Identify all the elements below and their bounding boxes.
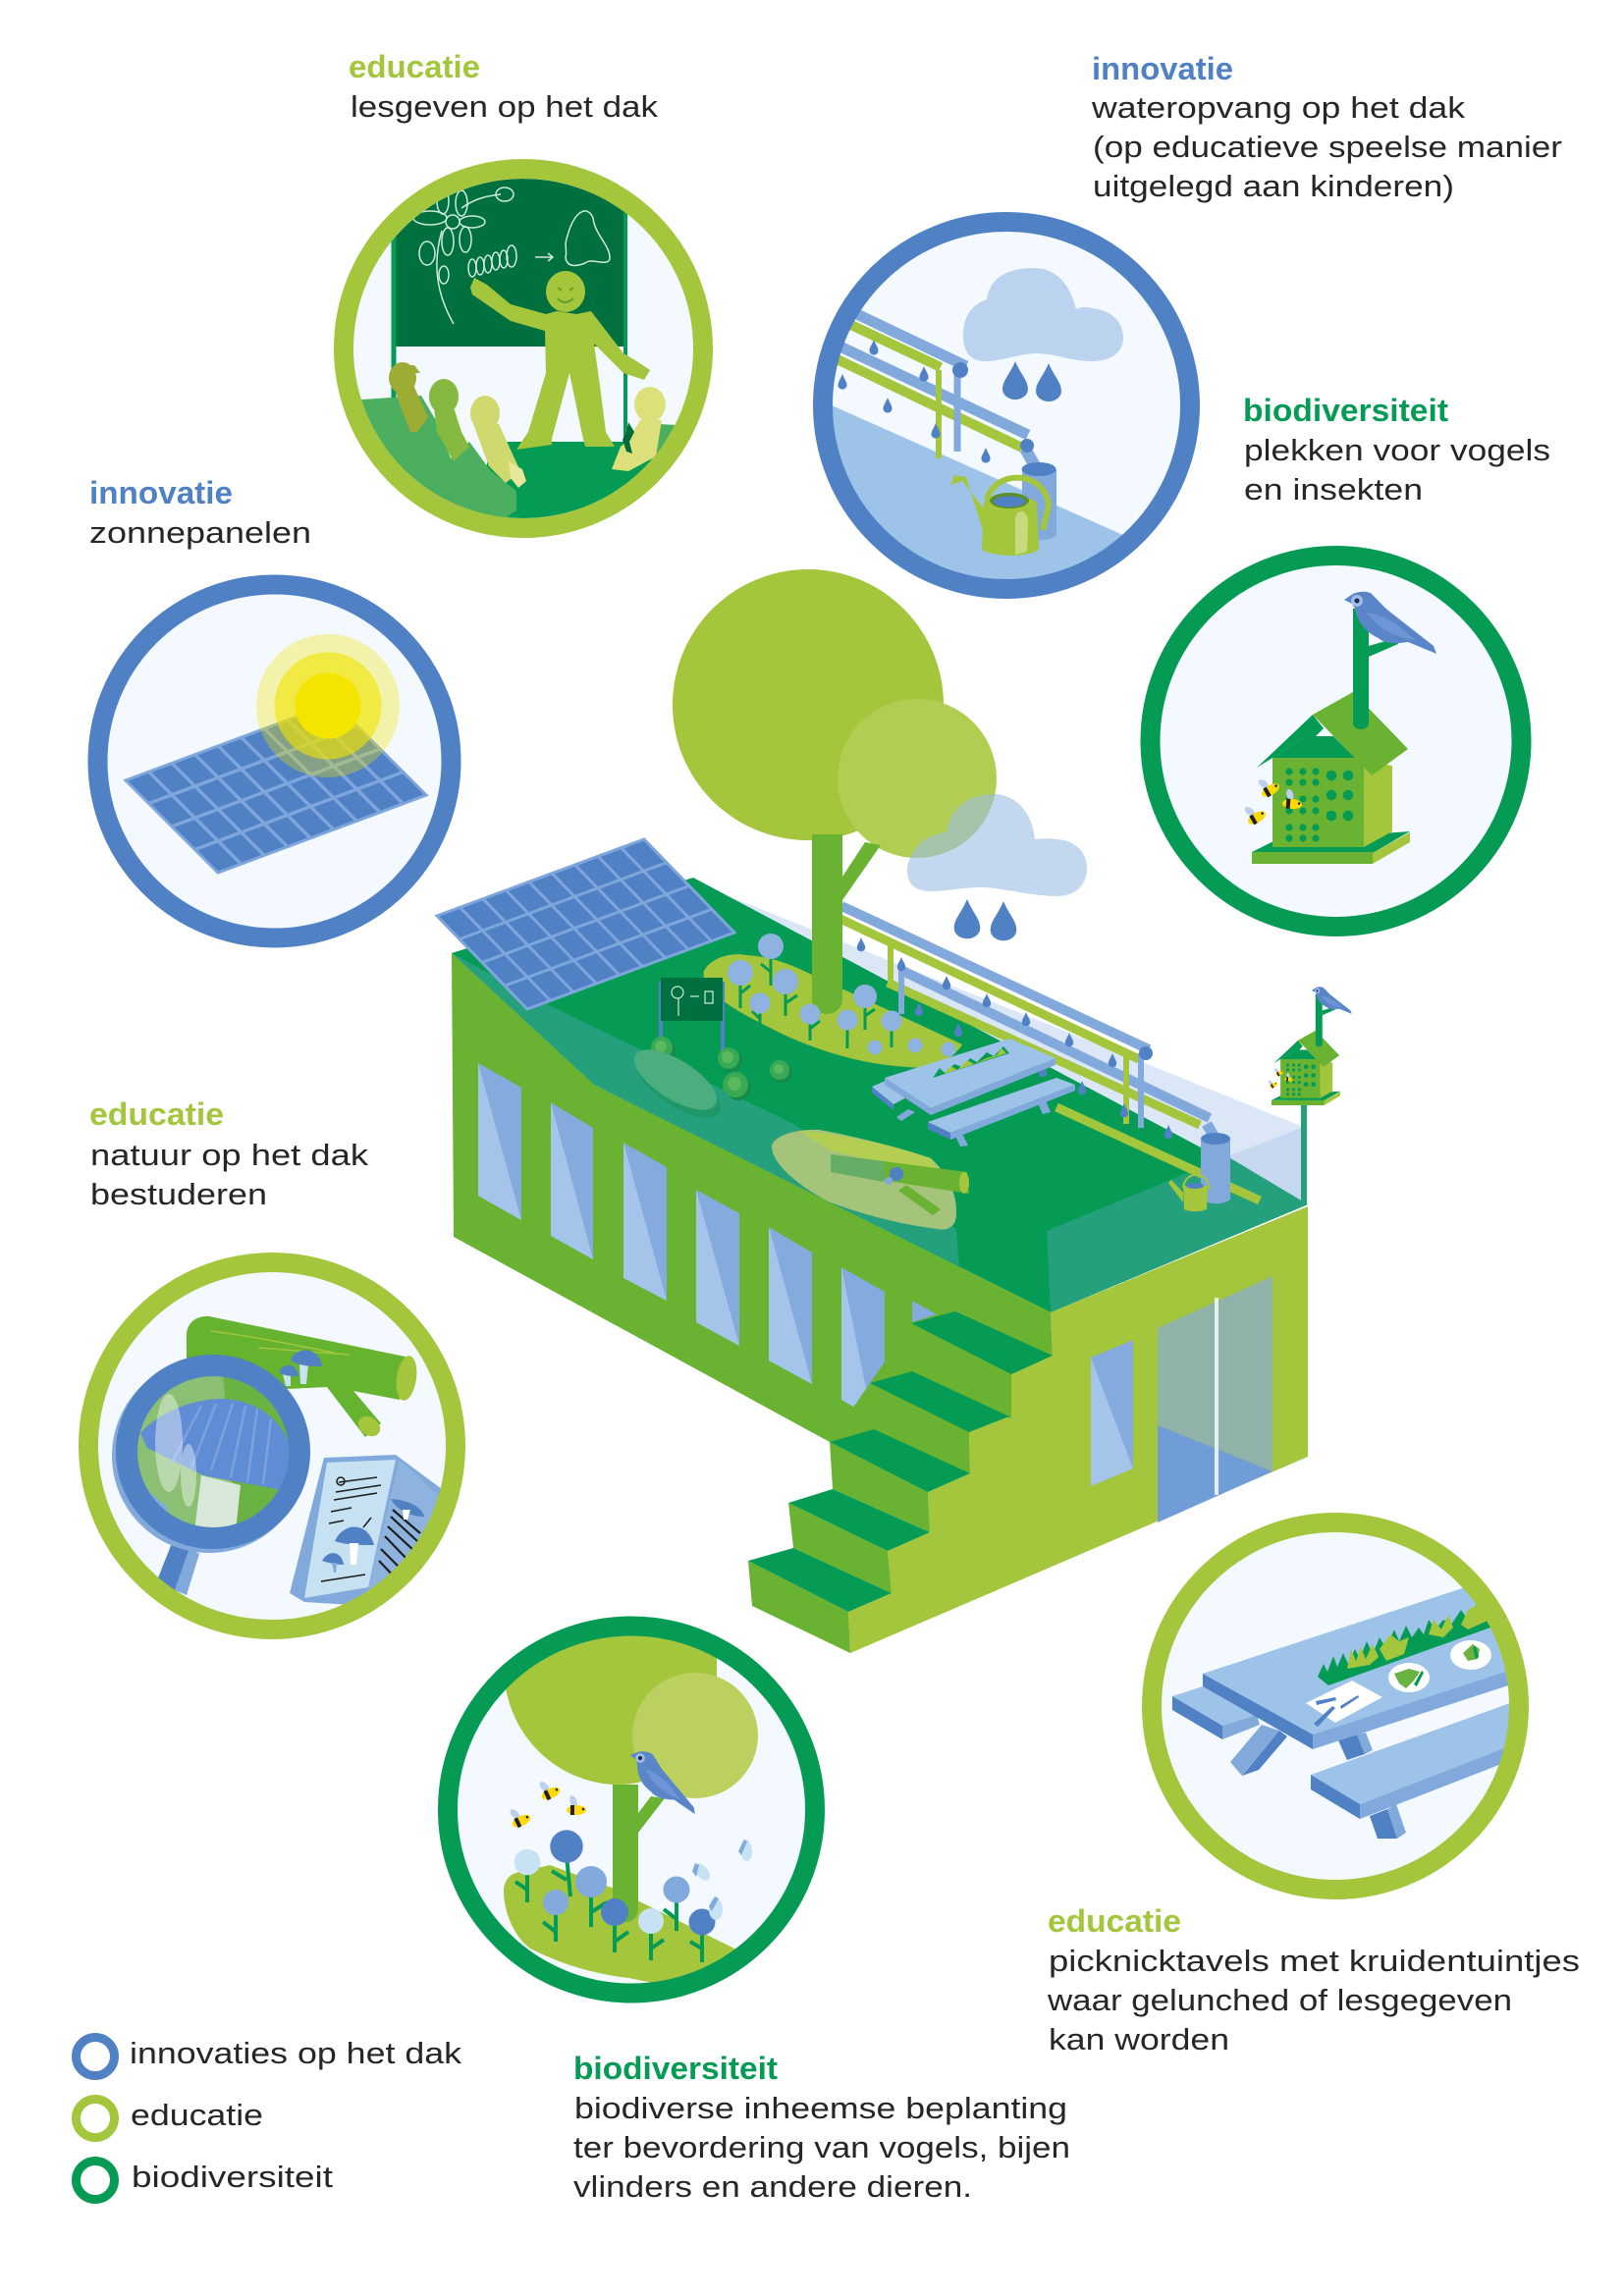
- ground: [478, 442, 666, 518]
- heading: educatie picknicktavels: waar gelunched of lesgegeven: [1047, 1983, 1512, 2017]
- heading: educatie lesgeven: lesgeven op het dak: [351, 89, 659, 124]
- building illustration: [437, 569, 1352, 1653]
- heading: biodiversiteit beplanting: ter bevordering van vogels, bijen: [573, 2130, 1070, 2164]
- panel: teacher on the roof: [344, 137, 703, 550]
- roof: [452, 878, 1308, 1312]
- heading: educatie picknicktavels: [1047, 1903, 1580, 2056]
- barrel: [1022, 469, 1056, 540]
- bird house on pole: [1267, 987, 1352, 1204]
- icon: sun: [256, 634, 400, 777]
- panel: water catchment: [805, 222, 1190, 609]
- mushrooms: [283, 1364, 308, 1386]
- icon: solar panel: [126, 703, 426, 873]
- icon: rain drops: [954, 899, 1016, 940]
- table: [1203, 1588, 1506, 1735]
- shrubs: [625, 1037, 792, 1129]
- icon: watering can: [950, 475, 1049, 556]
- butterflies: [691, 1840, 753, 1920]
- left bench: [1172, 1686, 1257, 1726]
- log patch: [772, 1130, 969, 1229]
- flower bed: [704, 954, 962, 1068]
- heading: educatie lesgeven: [349, 49, 659, 124]
- windows: [478, 1063, 937, 1417]
- heading: educatie picknicktavels: kan worden: [1049, 2022, 1229, 2056]
- legend: innovaties op het dak: [130, 2036, 462, 2070]
- handle: [175, 1548, 199, 1595]
- heading: innovatie wateropvang: wateropvang op het dak: [1091, 90, 1466, 125]
- legs: [1230, 1725, 1279, 1776]
- solar panel on roof: [437, 839, 734, 1009]
- heading: innovatie wateropvang: innovatie: [1092, 51, 1233, 86]
- picnic table: [872, 1039, 1075, 1147]
- flowers: [515, 1855, 702, 1962]
- heading: educatie natuur: bestuderen: [90, 1177, 267, 1211]
- heading: educatie picknicktavels: educatie: [1048, 1903, 1181, 1939]
- heading: educatie natuur: natuur op het dak: [90, 1138, 369, 1172]
- heading: innovatie zonnepanelen: [89, 475, 311, 550]
- herbs: [1318, 1602, 1497, 1685]
- heading: biodiversiteit beplanting: [573, 2051, 1070, 2204]
- legend: [77, 2036, 462, 2199]
- heading: biodiversiteit vogels en insekten: biodiversiteit: [1243, 393, 1448, 428]
- glass back wall: [693, 878, 1306, 1204]
- panel: picnic table: [1142, 1513, 1529, 1899]
- teal roof overlay: [452, 953, 1308, 1312]
- panel: studying nature: [88, 1262, 456, 1629]
- blackboard: [661, 978, 723, 1052]
- heading: innovatie zonnepanelen: innovatie: [89, 475, 233, 510]
- heading: innovatie zonnepanelen: zonnepanelen: [89, 515, 311, 550]
- teacher: [470, 271, 650, 450]
- tree: [673, 569, 997, 1014]
- legend: educatie: [131, 2098, 263, 2132]
- heading: educatie lesgeven: educatie: [349, 49, 480, 84]
- door: [1158, 1276, 1272, 1522]
- heading: biodiversiteit vogels en insekten: [1243, 393, 1550, 507]
- stairs: [748, 1311, 1053, 1653]
- barrel: [1201, 1133, 1230, 1203]
- legend: biodiversiteit: [132, 2160, 333, 2194]
- tree: [506, 1635, 717, 1785]
- heading: biodiversiteit beplanting: biodiversiteit: [573, 2051, 778, 2086]
- heading: educatie natuur: [89, 1096, 369, 1211]
- panel: biodiversity planting: [448, 1620, 815, 1993]
- heading: educatie natuur: educatie: [89, 1096, 224, 1132]
- log: [187, 1316, 406, 1437]
- chalk drawing: [413, 187, 610, 324]
- panel: solar panels: [98, 585, 452, 938]
- rain gutters: [828, 906, 1260, 1201]
- watering can: [1168, 1175, 1210, 1211]
- front wall: [452, 953, 1053, 1492]
- book: [290, 1455, 442, 1610]
- heading: innovatie wateropvang: uitgelegd aan kinderen): [1093, 169, 1454, 203]
- bees: [511, 1782, 586, 1828]
- magnifier: [112, 1382, 282, 1553]
- heading: biodiversiteit beplanting: vlinders en andere dieren.: [573, 2169, 972, 2204]
- gutters: [825, 306, 1037, 469]
- ground: [504, 1865, 746, 1988]
- kids: [389, 362, 666, 488]
- heading: innovatie wateropvang: [1091, 51, 1562, 203]
- heading: biodiversiteit vogels en insekten: en insekten: [1244, 472, 1423, 507]
- end window: [1091, 1340, 1133, 1486]
- heading: innovatie wateropvang: (op educatieve speelse manier: [1093, 130, 1562, 164]
- heading: biodiversiteit vogels en insekten: plekken voor vogels: [1244, 433, 1550, 467]
- icon: cloud: [907, 794, 1087, 896]
- heading: biodiversiteit beplanting: biodiverse inheemse beplanting: [574, 2091, 1067, 2125]
- heading: educatie picknicktavels: picknicktavels met kruidentuintjes: [1049, 1944, 1580, 1978]
- panel: bird and insect house: [1151, 556, 1522, 927]
- end wall: [848, 1206, 1308, 1653]
- right bench: [1370, 1809, 1397, 1839]
- plates and paper: [1388, 1663, 1430, 1692]
- flowers: [728, 934, 956, 1056]
- icon: cloud: [963, 268, 1123, 361]
